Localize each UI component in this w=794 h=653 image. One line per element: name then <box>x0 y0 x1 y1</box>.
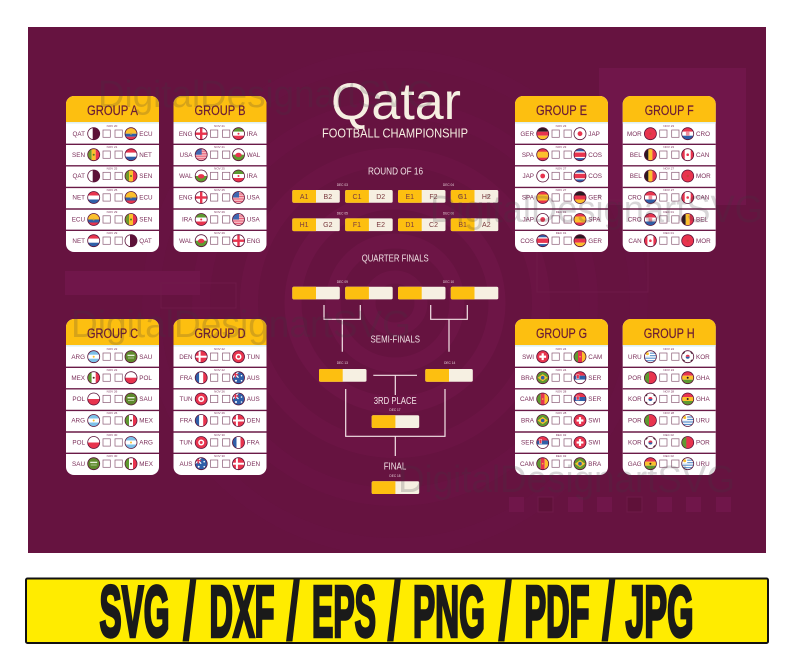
match: NET vs QAT <box>72 231 152 247</box>
match: AUS vs DEN: NOV 30 <box>214 454 225 458</box>
match: URU vs KOR: KOR <box>696 354 710 361</box>
match: SER vs SWI: SWI <box>588 440 600 447</box>
heading: round of 16: ROUND OF 16 <box>368 166 423 178</box>
match: MOR vs CRO <box>627 124 710 140</box>
match: E1 vs F2 <box>398 190 446 203</box>
match: A1 vs B2: A1 <box>300 194 308 201</box>
match: SER vs SWI <box>521 433 600 448</box>
match: B1 vs A2: B1 <box>458 222 467 229</box>
match: ARG vs SAU: SAU <box>139 354 153 361</box>
dates: round of 16: DEC 03 <box>337 183 348 187</box>
match: FRA vs AUS: FRA <box>180 375 193 382</box>
watermarks: DigitalDesignartSVG <box>398 459 735 501</box>
match: JAP vs SPA: DEC 01 <box>556 210 567 214</box>
match: KOR vs GHA <box>628 390 710 405</box>
match: POL vs ARG <box>72 433 153 448</box>
match: SPA vs COS: SPA <box>522 152 535 159</box>
dates: round of 16: DEC 06 <box>443 211 454 215</box>
banner background <box>26 578 768 643</box>
match: BRA vs SWI: BRA <box>521 418 535 425</box>
match: B1 vs A2: A2 <box>482 222 491 229</box>
title: Qatar: Qatar <box>331 73 461 131</box>
match: POL vs ARG: NOV 30 <box>107 433 118 437</box>
match: ENG vs USA: ENG <box>179 195 193 202</box>
match: BEL vs MOR: MOR <box>696 173 711 180</box>
match: CRO vs CAN <box>628 188 710 204</box>
panel: Group F <box>623 96 716 252</box>
match: QAT vs ECU: ECU <box>139 131 153 138</box>
match: TUN vs AUS <box>180 390 260 405</box>
final slot <box>372 481 419 494</box>
section: final <box>372 460 419 494</box>
match: TUN vs FRA: TUN <box>180 440 193 447</box>
watermarks: DigitalDesignartSVG <box>71 304 411 346</box>
match: FRA vs AUS: NOV 22 <box>214 368 225 372</box>
match: G1 vs H2 <box>451 190 498 203</box>
watermarks: DigitalDesignartSVG <box>430 189 763 231</box>
dates: quarter finals: DEC 09 <box>337 280 348 284</box>
section: round of 16 <box>292 166 498 231</box>
match: C1 vs D2 <box>345 190 393 203</box>
dates: quarter finals: DEC 10 <box>443 280 454 284</box>
match: ARG vs MEX: MEX <box>139 418 154 425</box>
match: JAP vs SPA: SPA <box>588 217 601 224</box>
panel: Group C <box>66 319 159 475</box>
match: MOR vs CRO: CRO <box>696 131 710 138</box>
match: ECU vs SEN: SEN <box>139 217 153 224</box>
match: NET vs QAT: QAT <box>139 238 152 245</box>
match: SWI vs CAM <box>522 347 602 363</box>
match: CAN vs MOR: DEC 01 <box>663 231 674 235</box>
section: semi-finals <box>319 334 473 382</box>
match: JAP vs COS: NOV 27 <box>556 166 567 170</box>
match: E1 vs F2: F2 <box>429 194 438 201</box>
match: BRA vs SER: BRA <box>521 375 535 382</box>
third place slot <box>372 415 419 428</box>
match: ARG vs MEX: NOV 26 <box>107 411 118 415</box>
heading: Group C: GROUP C <box>87 326 138 341</box>
match: JAP vs SPA <box>522 210 601 226</box>
panel: Group G <box>515 319 608 475</box>
match: URU vs KOR <box>628 347 710 363</box>
match: COS vs GER: DEC 01 <box>556 231 567 235</box>
match: ENG vs IRA: IRA <box>247 131 258 138</box>
date: third place: DEC 17 <box>389 408 401 412</box>
match: KOR vs GHA: GHA <box>696 396 710 403</box>
banner format labels: DXF <box>210 572 274 652</box>
match: SPA vs GER <box>522 188 602 204</box>
heading: 3rd place: 3RD PLACE <box>374 395 417 407</box>
heading: Group E: GROUP E <box>536 103 587 118</box>
match: POL vs ARG: ARG <box>139 440 153 447</box>
match: GAG vs URU: GAG <box>628 461 642 468</box>
match: FRA vs DEN: DEN <box>247 418 261 425</box>
match: F1 vs E2: E2 <box>376 222 385 229</box>
banner format labels: PNG <box>413 572 485 652</box>
match: FRA vs DEN <box>180 411 261 426</box>
match: NET vs ECU: NOV 25 <box>107 188 118 192</box>
match: GER vs JAP: JAP <box>588 131 600 138</box>
bracket line: third place <box>373 375 417 395</box>
match: POR vs URU: NOV 28 <box>663 411 674 415</box>
match: CRO vs BEL: DEC 01 <box>663 210 674 214</box>
dates: round of 16 <box>337 183 454 215</box>
match: CAM vs BRA: BRA <box>588 461 602 468</box>
match: SAU vs MEX: NOV 30 <box>107 454 118 458</box>
match: KOR vs GHA: KOR <box>628 396 642 403</box>
match: IRA vs USA: USA <box>247 217 261 224</box>
banner format labels <box>100 564 694 653</box>
match: SWI vs CAM: SWI <box>522 354 534 361</box>
match: WAL vs ENG <box>179 231 261 247</box>
match: BEL vs CAN: BEL <box>630 152 642 159</box>
heading: semi-finals: SEMI-FINALS <box>371 334 420 346</box>
panel: Group A <box>66 96 159 252</box>
match: A1 vs B2: B2 <box>324 194 332 201</box>
match: BRA vs SER: NOV 24 <box>556 368 567 372</box>
match: POR vs URU <box>628 411 710 426</box>
match: USA vs WAL: WAL <box>247 152 261 159</box>
match: COS vs GER: GER <box>588 238 602 245</box>
match: SAU vs MEX: SAU <box>72 461 85 468</box>
match: CRO vs CAN: CRO <box>628 195 642 202</box>
match: CAM vs SER: SER <box>588 396 602 403</box>
match: BRA vs SWI <box>521 411 600 426</box>
match: URU vs KOR: URU <box>628 354 642 361</box>
match: SPA vs COS: NOV 23 <box>556 145 567 149</box>
match: ARG vs SAU <box>71 347 153 363</box>
match: NET vs ECU <box>72 188 153 204</box>
match: G1 vs H2: H2 <box>482 194 491 201</box>
match: CRO vs CAN: NOV 27 <box>663 188 674 192</box>
match: C1 vs D2: C1 <box>353 194 362 201</box>
match: MEX vs POL: NOV 22 <box>107 368 118 372</box>
match: KOR vs POR: KOR <box>628 440 642 447</box>
dates: semi-finals: DEC 14 <box>444 361 456 365</box>
match: F1 vs E2 <box>345 218 393 231</box>
match: SER vs SWI: SER <box>521 440 534 447</box>
match: A1 vs B2 <box>292 190 340 203</box>
match: QAT vs SEN <box>73 166 153 182</box>
match: POL vs SAU <box>72 390 153 405</box>
panel: Group E <box>515 96 608 252</box>
match: TUN vs FRA: FRA <box>247 440 260 447</box>
match: WAL vs ENG: WAL <box>179 238 193 245</box>
match: TUN vs FRA <box>180 433 260 448</box>
heading: Group A: GROUP A <box>87 103 138 118</box>
match: GER vs JAP <box>520 124 600 140</box>
match: JAP vs SPA: JAP <box>522 217 534 224</box>
match: BEL vs CAN: NOV 23 <box>663 145 674 149</box>
match: WAL vs IRA: WAL <box>179 173 193 180</box>
format banner: JPG <box>626 572 694 652</box>
match: BEL vs CAN <box>630 145 710 161</box>
match: GAG vs URU: DEC 02 <box>663 454 674 458</box>
match: ENG vs USA: NOV 25 <box>214 188 225 192</box>
match: BEL vs CAN: CAN <box>696 152 710 159</box>
bracket lines: semi-finals to final <box>346 389 445 456</box>
match: NET vs QAT: NET <box>72 238 85 245</box>
banner format labels: PDF <box>524 572 590 652</box>
heading: Group B: GROUP B <box>194 103 246 118</box>
match: CAM vs BRA: DEC 02 <box>556 454 567 458</box>
match: SEN vs NET: NET <box>139 152 152 159</box>
match: FRA vs AUS <box>180 368 260 384</box>
match: NET vs QAT: NOV 29 <box>107 231 118 235</box>
match: F1 vs E2: F1 <box>353 222 361 229</box>
section: quarter finals <box>292 253 498 299</box>
match: POR vs GHA: NOV 24 <box>663 368 674 372</box>
heading: Group F: GROUP F <box>645 103 694 118</box>
match: MOR vs CRO: MOR <box>627 131 642 138</box>
match: BEL vs MOR <box>630 166 711 182</box>
match: USA vs WAL <box>180 145 261 161</box>
match: QAT vs SEN: QAT <box>73 173 85 180</box>
match: ARG vs SAU: NOV 22 <box>107 347 118 351</box>
match: SAU vs MEX: MEX <box>139 461 154 468</box>
banner format labels: EPS <box>312 572 376 652</box>
match: G1 vs H2: G1 <box>458 194 467 201</box>
match: GER vs JAP: GER <box>520 131 534 138</box>
match: SWI vs CAM: CAM <box>588 354 602 361</box>
match: CAM vs SER: CAM <box>520 396 534 403</box>
heading: Group G: GROUP G <box>536 326 587 341</box>
match: TUN vs AUS: TUN <box>180 396 193 403</box>
match: POR vs GHA <box>628 368 710 384</box>
match: ENG vs IRA: ENG <box>179 131 193 138</box>
match: POL vs SAU: NOV 26 <box>107 390 118 394</box>
match: NET vs ECU: ECU <box>139 195 153 202</box>
quarter final slots <box>292 287 498 299</box>
panel: Group B <box>174 96 266 252</box>
match: D1 vs C2 <box>398 218 446 231</box>
match: CAM vs BRA <box>520 454 602 470</box>
match: QAT vs ECU <box>73 124 153 140</box>
panel: Group D <box>174 319 266 475</box>
match: WAL vs IRA: IRA <box>247 173 258 180</box>
match: WAL vs IRA: NOV 25 <box>214 166 225 170</box>
match: COS vs GER: COS <box>520 238 534 245</box>
match: POR vs URU: POR <box>628 418 642 425</box>
match: ECU vs SEN: NOV 29 <box>107 210 118 214</box>
match: BRA vs SER <box>521 368 602 384</box>
match: KOR vs POR <box>628 433 710 448</box>
match: SPA vs GER: SPA <box>522 195 535 202</box>
match: H1 vs G2: G2 <box>323 222 333 229</box>
match: SEN vs NET: SEN <box>72 152 85 159</box>
dates: round of 16: DEC 05 <box>337 211 348 215</box>
match: GER vs JAP: NOV 23 <box>556 124 567 128</box>
match: POR vs URU: URU <box>696 418 710 425</box>
match: SER vs SWI: DEC 02 <box>556 433 567 437</box>
background rings and shapes <box>65 59 746 547</box>
match: WAL vs ENG: NOV 29 <box>214 231 225 235</box>
match: URU vs KOR: NOV 24 <box>663 347 674 351</box>
match: DEN vs TUN: TUN <box>247 354 260 361</box>
match: KOR vs POR: DEC 02 <box>663 433 674 437</box>
match: IRA vs USA: NOV 29 <box>214 210 225 214</box>
match: CAN vs MOR: MOR <box>696 238 711 245</box>
match: JAP vs COS <box>522 166 602 182</box>
match: QAT vs SEN: NOV 25 <box>107 166 118 170</box>
dates: semi-finals <box>337 361 456 365</box>
watermarks: DigitalDesignartSVG <box>98 74 435 116</box>
match: ECU vs SEN: ECU <box>72 217 85 224</box>
match: QAT vs ECU: NOV 20 <box>107 124 118 128</box>
dates: round of 16: DEC 04 <box>443 183 454 187</box>
heading: Group H: GROUP H <box>644 326 695 341</box>
match: ARG vs MEX: ARG <box>71 418 85 425</box>
match: SEN vs NET <box>72 145 152 161</box>
match: TUN vs AUS: AUS <box>247 396 260 403</box>
match: BEL vs MOR: BEL <box>630 173 642 180</box>
match: DEN vs TUN: DEN <box>179 354 193 361</box>
match: IRA vs USA <box>182 210 261 226</box>
watermarks <box>71 74 763 501</box>
match: MOR vs CRO: NOV 23 <box>663 124 674 128</box>
match: BRA vs SWI: NOV 28 <box>556 411 567 415</box>
date: final: DEC 18 <box>389 474 401 478</box>
match: GAG vs URU: URU <box>696 461 710 468</box>
match: BRA vs SER: SER <box>588 375 602 382</box>
match: ENG vs IRA <box>179 124 258 140</box>
match: CRO vs CAN: CAN <box>696 195 710 202</box>
match: IRA vs USA: IRA <box>182 217 193 224</box>
match: ARG vs MEX <box>71 411 154 426</box>
semi-final slots <box>319 369 473 382</box>
match: CAM vs BRA: CAM <box>520 461 534 468</box>
match: TUN vs FRA: NOV 30 <box>214 433 225 437</box>
match: QAT vs SEN: SEN <box>139 173 153 180</box>
match: SAU vs MEX <box>72 454 154 470</box>
heading: quarter finals: QUARTER FINALS <box>362 253 429 265</box>
match: MEX vs POL <box>71 368 152 384</box>
match: SPA vs GER: GER <box>588 195 602 202</box>
match: AUS vs DEN: AUS <box>180 461 192 468</box>
match: B1 vs A2 <box>451 218 498 231</box>
match: ECU vs SEN <box>72 210 153 226</box>
match: USA vs WAL: NOV 21 <box>214 145 225 149</box>
match: CAN vs MOR: CAN <box>628 238 642 245</box>
match: QAT vs ECU: QAT <box>73 131 85 138</box>
match: SPA vs COS <box>522 145 602 161</box>
match: CRO vs BEL: CRO <box>628 217 642 224</box>
match: DEN vs TUN: NOV 22 <box>214 347 225 351</box>
match: CAN vs MOR <box>628 231 711 247</box>
match: DEN vs TUN <box>179 347 260 363</box>
match: JAP vs COS: JAP <box>522 173 534 180</box>
banner format labels: SVG <box>100 572 170 652</box>
match: MEX vs POL: POL <box>139 375 152 382</box>
match: SEN vs NET: NOV 21 <box>107 145 118 149</box>
match: MEX vs POL: MEX <box>71 375 86 382</box>
match: USA vs WAL: USA <box>180 152 193 159</box>
match: BRA vs SWI: SWI <box>588 418 600 425</box>
match: WAL vs IRA <box>179 166 258 182</box>
match: FRA vs DEN: FRA <box>180 418 193 425</box>
format banner <box>26 564 768 653</box>
match: POL vs ARG: POL <box>72 440 85 447</box>
match: SPA vs COS: COS <box>588 152 602 159</box>
match: FRA vs AUS: AUS <box>247 375 260 382</box>
match: GAG vs URU <box>628 454 710 470</box>
heading: final: FINAL <box>384 460 406 472</box>
match: SWI vs CAM: NOV 24 <box>556 347 567 351</box>
match: AUS vs DEN: DEN <box>247 461 261 468</box>
match: AUS vs DEN <box>180 454 261 470</box>
match: ENG vs USA <box>179 188 261 204</box>
match: POL vs SAU: SAU <box>139 396 153 403</box>
match: SPA vs GER: NOV 27 <box>556 188 567 192</box>
match: ENG vs IRA: NOV 21 <box>214 124 225 128</box>
match: FRA vs DEN: NOV 26 <box>214 411 225 415</box>
match: H1 vs G2 <box>292 218 340 231</box>
match: CAM vs SER <box>520 390 602 405</box>
match: ARG vs SAU: ARG <box>71 354 85 361</box>
match: ENG vs USA: USA <box>247 195 261 202</box>
match: JAP vs COS: COS <box>588 173 602 180</box>
match: KOR vs POR: POR <box>696 440 710 447</box>
panel: Group H <box>623 319 716 475</box>
match: COS vs GER <box>520 231 602 247</box>
section: third place <box>372 395 419 428</box>
match: H1 vs G2: H1 <box>300 222 309 229</box>
match: CRO vs BEL: BEL <box>696 217 708 224</box>
match: C1 vs D2: D2 <box>376 194 385 201</box>
match: WAL vs ENG: ENG <box>247 238 261 245</box>
match: CRO vs BEL <box>628 210 708 226</box>
match: TUN vs AUS: NOV 26 <box>214 390 225 394</box>
match: D1 vs C2: D1 <box>405 222 414 229</box>
match: KOR vs GHA: NOV 28 <box>663 390 674 394</box>
match: CAM vs SER: NOV 28 <box>556 390 567 394</box>
match: POR vs GHA: POR <box>628 375 642 382</box>
match: E1 vs F2: E1 <box>406 194 414 201</box>
match: POR vs GHA: GHA <box>696 375 710 382</box>
match: POL vs SAU: POL <box>72 396 85 403</box>
heading: Group D: GROUP D <box>194 326 246 341</box>
dates: quarter finals <box>337 280 454 284</box>
background panel <box>28 27 766 553</box>
match: D1 vs C2: C2 <box>429 222 438 229</box>
subtitle: FOOTBALL CHAMPIONSHIP <box>322 126 468 141</box>
match: BEL vs MOR: NOV 27 <box>663 166 674 170</box>
dates: semi-finals: DEC 13 <box>337 361 348 365</box>
match: NET vs ECU: NET <box>72 195 85 202</box>
bracket lines: quarter finals to semi-finals <box>324 305 467 352</box>
